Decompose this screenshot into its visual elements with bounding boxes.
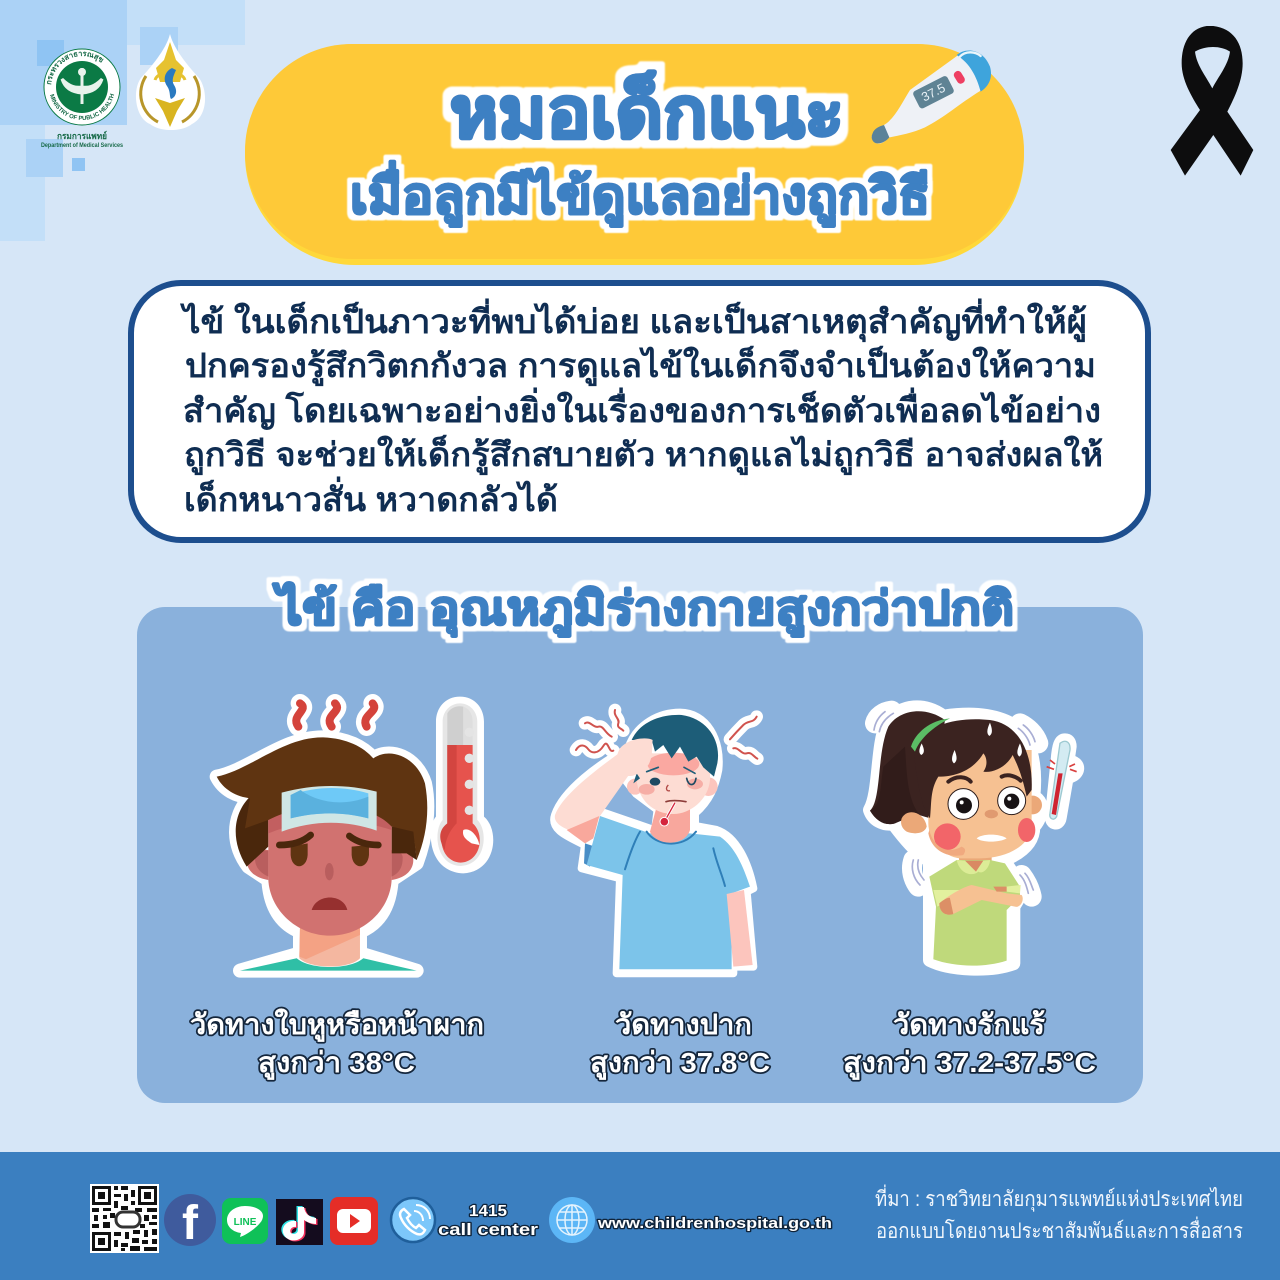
intro paragraph: ถูกวิธี จะช่วยให้เด็กรู้สึกสบายตัว หากดูแลไม่ถูกวิธี อาจส่งผลให้ xyxy=(184,434,1103,476)
cold patch xyxy=(282,786,377,832)
source credit: ออกแบบโดยงานประชาสัมพันธ์และการสื่อสาร xyxy=(876,1216,1243,1243)
face xyxy=(268,813,392,936)
illustration: boy with cold patch and thermometer xyxy=(217,697,493,971)
call center label: 1415 xyxy=(469,1203,507,1220)
shiver marks xyxy=(874,711,1038,897)
nose and mouth xyxy=(325,863,334,880)
caption: oral: สูงกว่า 37.8°C xyxy=(590,1047,770,1080)
caption: armpit: วัดทางรักแร้ xyxy=(893,1009,1045,1040)
footer bar xyxy=(0,1152,1280,1280)
panel: intro text box xyxy=(131,283,1148,540)
icon: black ribbon xyxy=(1171,26,1253,176)
logo: children's hospital drop xyxy=(136,34,205,130)
icon: Facebook: f xyxy=(182,1197,199,1250)
hairband xyxy=(911,718,950,752)
illustration: shivering girl with thermometer xyxy=(870,707,1081,969)
ears xyxy=(247,849,413,880)
shirt xyxy=(587,816,750,969)
eyes xyxy=(948,789,979,819)
intro paragraph: เด็กหนาวสั่น หวาดกลัวได้ xyxy=(184,476,558,518)
head silhouette xyxy=(217,737,427,971)
icon: Facebook xyxy=(164,1194,216,1250)
gap between arm and neck xyxy=(603,782,653,825)
website: www.childrenhospital.go.th xyxy=(597,1215,832,1232)
shirt back sleeve xyxy=(584,843,595,867)
raised arm xyxy=(555,745,653,837)
QR code xyxy=(90,1184,159,1253)
neck xyxy=(650,807,690,843)
head xyxy=(637,753,710,814)
caption: ear or forehead: วัดทางใบหูหรือหน้าผาก xyxy=(190,1008,484,1042)
icon: LINE xyxy=(222,1198,268,1244)
eyes, nose, mouth xyxy=(647,767,695,773)
far arm xyxy=(727,890,753,967)
intro paragraph: ปกครองรู้สึกวิตกกังวล การดูแลไข้ในเด็กจึงจำเป็นต้องให้ความ xyxy=(185,345,1096,387)
icon: globe xyxy=(549,1197,595,1243)
title pill xyxy=(245,44,1024,265)
heat waves xyxy=(296,703,374,727)
title line 2: เมื่อลูกมีไข้ดูแลอย่างถูกวิธี xyxy=(350,161,930,227)
ears xyxy=(699,777,718,796)
ponytail xyxy=(870,711,945,824)
icon: TikTok xyxy=(276,1199,323,1245)
source credit xyxy=(875,1184,1243,1243)
white outline xyxy=(870,707,1041,969)
neck xyxy=(958,853,992,873)
crossed arms xyxy=(939,885,1023,915)
caption: ear or forehead: สูงกว่า 38°C xyxy=(258,1047,415,1080)
thermometer xyxy=(1047,737,1081,826)
hand xyxy=(617,738,653,776)
caption: ear or forehead xyxy=(190,1008,484,1080)
icon: phone xyxy=(391,1198,435,1242)
source credit: ที่มา : ราชวิทยาลัยกุมารแพทย์แห่งประเทศไทย xyxy=(875,1184,1243,1212)
icon: LINE: LINE xyxy=(234,1217,257,1228)
caption: oral xyxy=(590,1009,770,1080)
shirt xyxy=(240,958,417,971)
caption: oral: วัดทางปาก xyxy=(615,1009,752,1040)
hair front xyxy=(217,737,427,860)
intro paragraph xyxy=(180,298,1103,518)
caption: armpit xyxy=(843,1009,1096,1080)
section heading: ไข้ คือ อุณหภูมิร่างกายสูงกว่าปกติ xyxy=(272,582,1014,637)
icon: digital thermometer xyxy=(872,50,991,144)
ear xyxy=(901,812,927,833)
intro paragraph: ไข้ ในเด็กเป็นภาวะที่พบได้บ่อย และเป็นสาเหตุสำคัญที่ทำให้ผู้ xyxy=(180,298,1087,343)
logo: Ministry of Public Health: กรมการแพทย์ xyxy=(57,130,107,141)
sweat drops xyxy=(919,723,1022,763)
thermometer xyxy=(431,697,493,873)
logo: Ministry of Public Health xyxy=(41,48,124,149)
neck xyxy=(299,927,360,967)
logo: Ministry of Public Health: กระทรวงสาธารณสุข xyxy=(47,52,104,84)
stress squiggles xyxy=(576,710,757,759)
cheeks xyxy=(934,823,961,850)
call center label xyxy=(438,1203,538,1239)
white outline xyxy=(554,713,753,973)
panel: temperature methods xyxy=(137,607,1143,1103)
hair top xyxy=(913,719,1032,818)
illustration: boy holding forehead with oral thermometer xyxy=(554,710,757,973)
corner square pattern xyxy=(0,0,245,241)
face xyxy=(928,750,1032,858)
logo: Ministry of Public Health: Department of Medical Services xyxy=(41,143,124,149)
icon: digital thermometer: 37.5 xyxy=(919,81,948,104)
oral thermometer xyxy=(665,803,675,821)
call center label: call center xyxy=(438,1220,538,1239)
logo: Ministry of Public Health: MINISTRY OF PUBLIC HEALTH xyxy=(50,94,114,120)
intro paragraph: สำคัญ โดยเฉพาะอย่างยิ่งในเรื่องของการเช็ดตัวเพื่อลดไข้อย่าง xyxy=(183,387,1101,430)
hair back xyxy=(236,797,417,867)
dress xyxy=(929,860,1020,966)
caption: armpit: สูงกว่า 37.2-37.5°C xyxy=(843,1047,1096,1080)
eyebrows and eyes xyxy=(291,843,369,866)
icon: YouTube xyxy=(330,1197,378,1245)
eyebrows xyxy=(948,775,1021,782)
nose and mouth xyxy=(985,810,998,818)
hair xyxy=(632,715,718,777)
title line 1: หมอเด็กแนะ xyxy=(450,70,844,152)
